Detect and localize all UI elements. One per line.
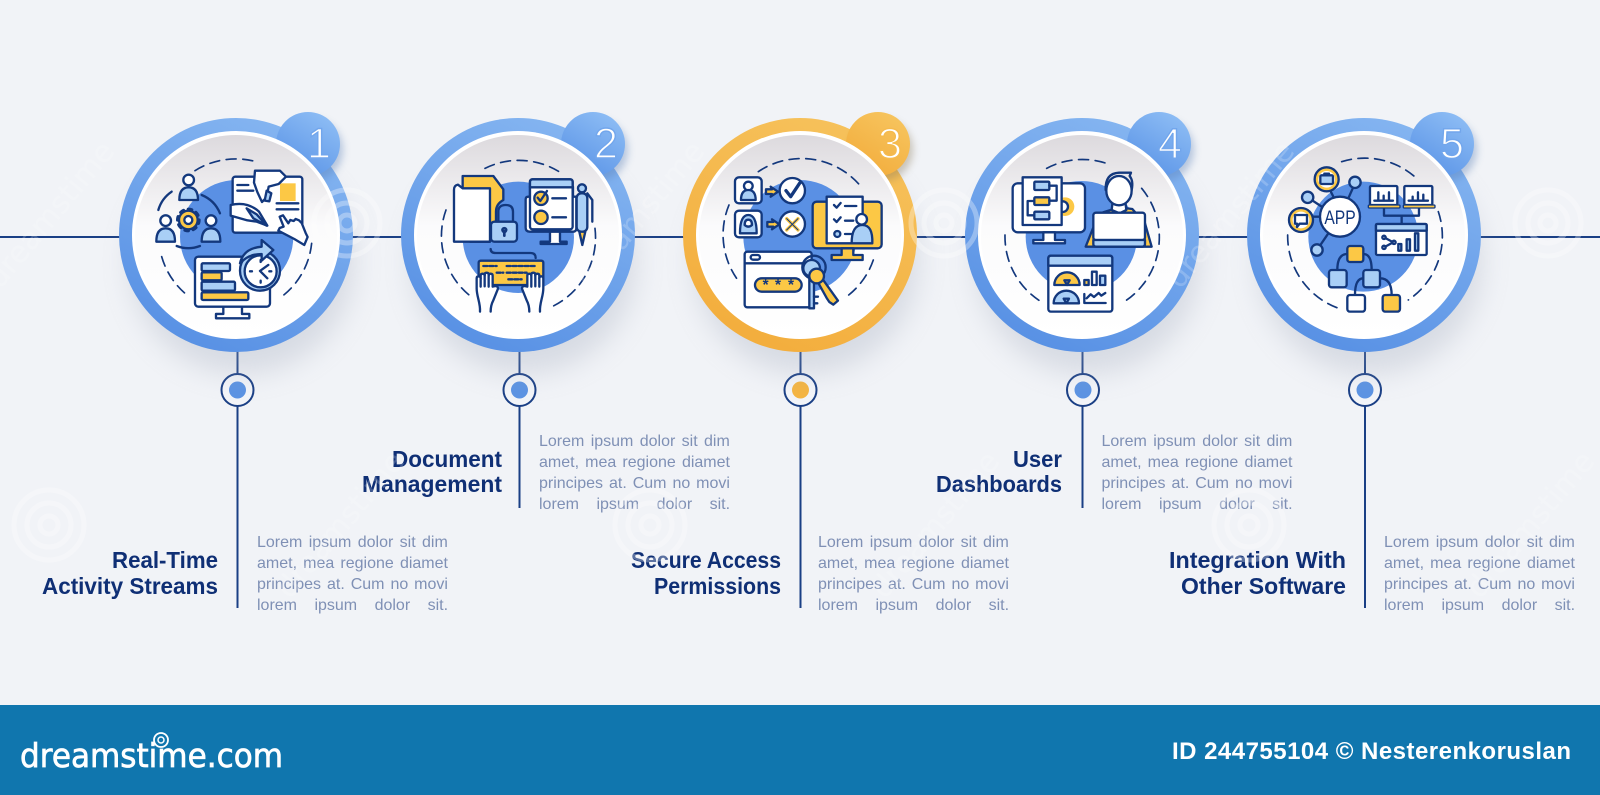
connector and node 1: [222, 345, 254, 608]
body text 2: amet, mea regione diamet: [539, 454, 731, 471]
body text 2: lorem ipsum dolor sit.: [539, 496, 730, 513]
body text 3: lorem ipsum dolor sit.: [818, 597, 1009, 614]
icon: app hub, laptops, analytics window and flowchart: APP: [1324, 208, 1356, 229]
icon: access approval, monitor checklist, password window and keys: *: [775, 277, 781, 294]
watermark overlay: dreamstime: [1459, 445, 1600, 605]
body text 3: amet, mea regione diamet: [818, 555, 1010, 572]
heading 1: Real-Time: [112, 547, 218, 573]
body text 5: lorem ipsum dolor sit.: [1384, 597, 1575, 614]
connector and node 3: [784, 345, 816, 608]
watermark overlay: dreamstime: [269, 445, 412, 605]
body text 5: [1384, 534, 1576, 614]
body text 3: [818, 534, 1010, 614]
horizontal timeline: [0, 236, 1600, 238]
watermark overlay: dreamstime: [864, 445, 1007, 605]
heading 2: Document: [392, 446, 502, 472]
watermark overlay: dreamstime: [1159, 135, 1302, 295]
number 3: 3: [878, 120, 902, 168]
heading 2: Management: [362, 471, 502, 497]
heading 3: Permissions: [654, 573, 781, 599]
body text 4: [1102, 433, 1293, 513]
icon: access approval, monitor checklist, password window and keys: *: [788, 277, 794, 294]
icon: folder, lock, checklist monitor, pen and keyboard: [441, 160, 596, 312]
body text 4: amet, mea regione diamet: [1102, 454, 1293, 471]
heading 4: User: [1013, 446, 1062, 472]
heading 5: Other Software: [1181, 573, 1346, 599]
body text 5: principes at. Cum no movi: [1384, 576, 1575, 593]
body text 2: Lorem ipsum dolor sit dim: [539, 433, 730, 450]
ring and badge 3: [683, 112, 918, 374]
panel: step 3 secure access permissions: [631, 112, 1010, 614]
body text 3: principes at. Cum no movi: [818, 576, 1009, 593]
ring and badge 4: [965, 112, 1200, 374]
body text 1: principes at. Cum no movi: [257, 576, 448, 593]
panel: step 4 user dashboards: [936, 112, 1293, 513]
panel: step 2 document management: [362, 112, 731, 513]
body text 1: amet, mea regione diamet: [257, 555, 449, 572]
number 4: 4: [1158, 120, 1182, 168]
heading 2: [362, 446, 502, 497]
ring and badge 1: [119, 112, 354, 374]
icon: access approval, monitor checklist, password window and keys: *: [763, 277, 769, 294]
panel: step 5 integration with other software: [1169, 112, 1576, 614]
panel: step 1 real-time activity streams: [42, 112, 449, 614]
body text 3: Lorem ipsum dolor sit dim: [818, 534, 1009, 551]
number 5: 5: [1440, 120, 1464, 168]
ring and badge 5: [1247, 112, 1482, 374]
heading 4: [936, 446, 1062, 497]
icon: app hub, laptops, analytics window and flowchart: [1288, 158, 1442, 312]
heading 5: Integration With: [1169, 547, 1346, 573]
number 1: 1: [307, 120, 331, 168]
connector and node 2: [504, 345, 536, 508]
number 2: 2: [594, 120, 618, 168]
watermark overlay: dreamstime: [569, 135, 712, 295]
body text 2: [539, 433, 731, 513]
heading 3: Secure Access: [631, 547, 781, 573]
connector and node 5: [1349, 345, 1381, 608]
icon: flowchart monitor, user at laptop and dashboard window: [1005, 159, 1159, 312]
body text 2: principes at. Cum no movi: [539, 475, 730, 492]
body text 5: amet, mea regione diamet: [1384, 555, 1576, 572]
connector and node 4: [1067, 345, 1099, 508]
heading 3: [631, 547, 781, 599]
body text 1: lorem ipsum dolor sit.: [257, 597, 448, 614]
icon: people, documents, monitor and clock: [156, 159, 312, 318]
body text 4: lorem ipsum dolor sit.: [1102, 496, 1293, 513]
bottom banner: [0, 705, 1600, 795]
body text 1: Lorem ipsum dolor sit dim: [257, 534, 448, 551]
body text 4: Lorem ipsum dolor sit dim: [1102, 433, 1292, 450]
heading 4: Dashboards: [936, 471, 1062, 497]
image id and author: ID 244755104 © Nesterenkoruslan: [1172, 738, 1571, 765]
icon: access approval, monitor checklist, password window and keys: [723, 159, 882, 308]
body text 1: [257, 534, 449, 614]
logo text: dreamstime.com: [20, 736, 283, 775]
heading 1: Activity Streams: [42, 573, 218, 599]
watermark overlay: [0, 135, 1600, 605]
heading 5: [1169, 547, 1346, 599]
body text 4: principes at. Cum no movi: [1102, 475, 1292, 492]
heading 1: [42, 547, 218, 599]
ring and badge 2: [401, 112, 636, 374]
body text 5: Lorem ipsum dolor sit dim: [1384, 534, 1575, 551]
